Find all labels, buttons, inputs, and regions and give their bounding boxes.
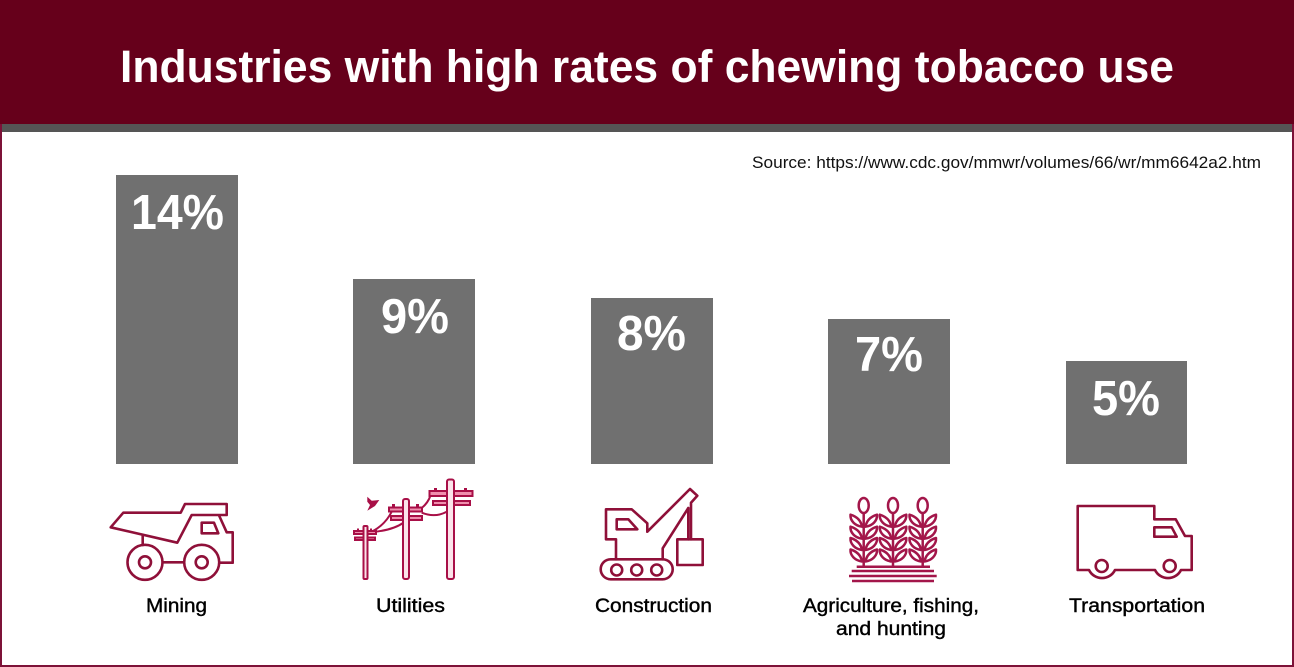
icon: bird	[367, 497, 379, 511]
source note: Source: https://www.cdc.gov/mmwr/volumes/66/wr/mm6642a2.htm	[752, 154, 1261, 172]
bar: utilities 9%	[353, 279, 475, 464]
label: agriculture, fishing, and hunting: and hunting	[836, 619, 946, 640]
bar: construction 8%	[591, 298, 713, 464]
icon: wheat field	[849, 498, 937, 581]
label: agriculture, fishing, and hunting: Agriculture, fishing,	[803, 596, 979, 617]
title: Industries with high rates of chewing tobacco use	[120, 41, 1174, 92]
label: agriculture, fishing, and hunting	[803, 596, 979, 640]
bar: transportation 5%: 5%	[1092, 372, 1160, 426]
bar: agriculture 7%	[828, 319, 950, 464]
icon: delivery van	[1078, 506, 1192, 578]
bar: mining 14%: 14%	[131, 186, 224, 240]
header underline bar	[2, 124, 1292, 132]
label: mining: Mining	[146, 596, 207, 617]
bar: construction 8%: 8%	[617, 307, 686, 361]
bar: utilities 9%: 9%	[381, 290, 449, 344]
bar: transportation 5%	[1066, 361, 1187, 464]
bar: agriculture 7%: 7%	[855, 328, 923, 382]
icon: mining dump truck	[111, 504, 233, 580]
bar: mining 14%	[116, 175, 238, 464]
label: construction: Construction	[595, 596, 712, 617]
header band	[0, 0, 1294, 124]
label: utilities: Utilities	[376, 596, 445, 617]
icon: construction crane	[601, 489, 703, 579]
label: transportation: Transportation	[1069, 596, 1205, 617]
icon: utility poles	[354, 480, 472, 579]
